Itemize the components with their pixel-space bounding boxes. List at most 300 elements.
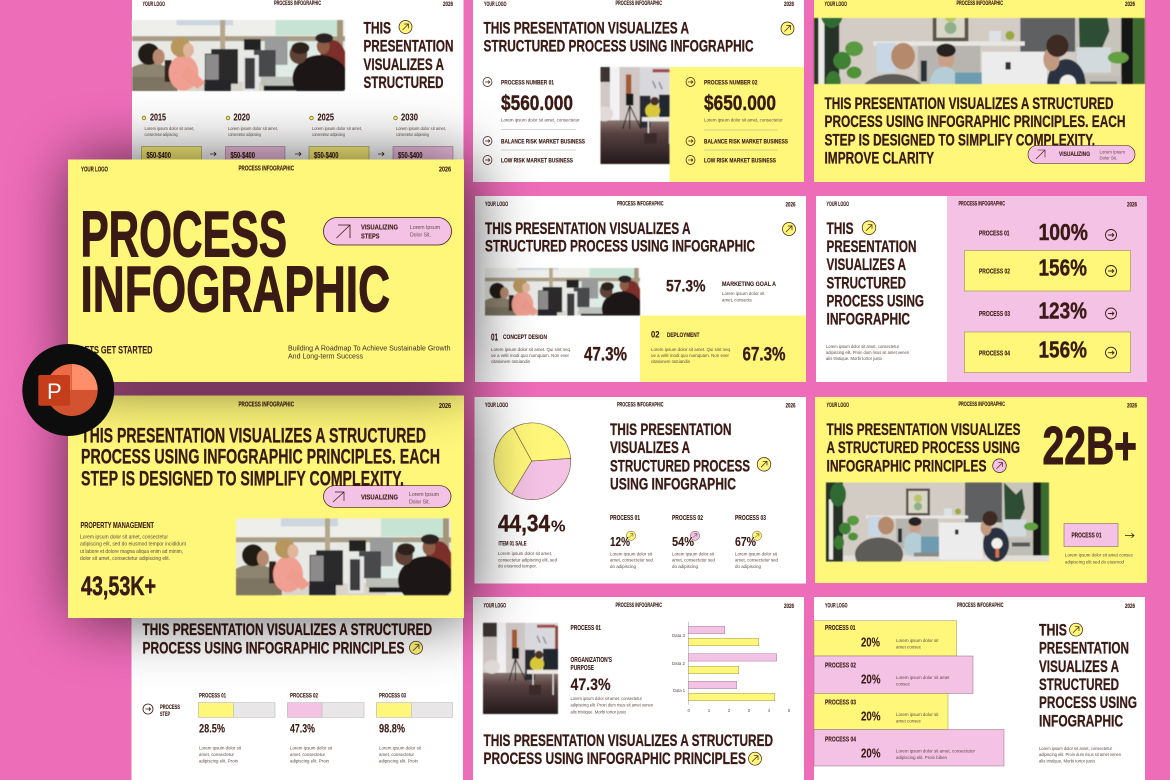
body text: Lorem ipsum dolor sit amet, consectetur <box>1039 746 1112 751</box>
photo: office <box>483 623 558 714</box>
process stats: Lorem ipsum dolor sit <box>672 552 715 556</box>
slide header: YOUR LOGO <box>826 403 849 409</box>
bar chart: Data 2 <box>672 661 686 666</box>
process stats: PROCESS 01 <box>610 515 640 522</box>
bar chart: 0 <box>688 708 690 713</box>
stepped bar 04: 20% <box>861 745 881 760</box>
process callout: adipiscing elit sed do eiusmod <box>1065 560 1124 564</box>
slide header <box>826 402 1137 410</box>
stat: item 01 sale: Lorem ipsum dolor sit amet, <box>498 551 552 557</box>
stepped bar 01 <box>814 621 956 656</box>
process stats: amet, consectetur sed <box>735 558 778 562</box>
bar chart: 3 <box>748 708 751 713</box>
stat: item 01 sale: % <box>551 519 566 536</box>
photo: office with desktop <box>814 0 1145 124</box>
process number 01: LOW RISK MARKET BUSINESS <box>501 158 573 164</box>
timeline: consectetur adipiscing <box>312 132 345 137</box>
slide header <box>81 166 451 174</box>
progress: process 03: PROCESS 03 <box>379 692 406 700</box>
bar chart: Data 3 <box>672 633 686 638</box>
heading <box>1039 621 1137 730</box>
step 01 concept design: Lorem ipsum dolor sit amet. Qui sint neq <box>491 347 570 352</box>
big stat: 43,53K+ <box>81 571 156 601</box>
slide header <box>485 402 796 410</box>
timeline <box>142 112 453 164</box>
slide header: PROCESS INFOGRAPHIC <box>617 402 664 408</box>
heading: PROCESS USING INFOGRAPHIC PRINCIPLES <box>142 639 404 657</box>
stepped bar 03: amet consec <box>896 718 922 724</box>
slide header: YOUR LOGO <box>142 2 165 8</box>
stepped bar 02: consec <box>896 682 911 686</box>
process step label <box>143 704 180 718</box>
tagline: LETS GET STARTED <box>80 344 153 356</box>
process stats: PROCESS 03 <box>735 515 766 522</box>
stepped bar 02 <box>814 656 973 694</box>
panel: stepped bars slide <box>814 597 1145 780</box>
slide header: PROCESS INFOGRAPHIC <box>956 1 1003 7</box>
process number 02: PROCESS NUMBER 02 <box>704 79 758 86</box>
text block: organization purpose: 47.3% <box>570 676 611 694</box>
slide header: 2026 <box>439 403 451 410</box>
process stats: amet, consectetur sed <box>672 558 715 562</box>
timeline: consectetur adipiscing <box>144 132 178 137</box>
stepped bar 03: Lorem ipsum dolor sit <box>896 712 939 717</box>
progress: process 03: adipiscing elit. Proin <box>379 758 418 764</box>
process number 02: BALANCE RISK MARKET BUSINESS <box>704 138 788 146</box>
slide header: PROCESS INFOGRAPHIC <box>238 402 294 408</box>
slide header: YOUR LOGO <box>484 604 506 610</box>
text block: property management: adipiscing elit, sed do eiusmod tempor incididunt <box>80 542 186 548</box>
heading: STRUCTURED PROCESS USING INFOGRAPHIC <box>484 37 754 56</box>
text block: organization purpose: alis tristique. Morbi tortor justo <box>570 710 626 714</box>
callout pill: Lorem Ipsum <box>410 225 440 231</box>
slide header: PROCESS INFOGRAPHIC <box>238 166 294 172</box>
stepped bar 04: Lorem ipsum dolor sit amet, consectetur <box>896 748 975 754</box>
process percent rows: PROCESS 04 <box>979 350 1010 358</box>
bar chart: 1 <box>708 708 711 713</box>
panel: bar chart slide <box>473 597 804 780</box>
big stat: 22B+ <box>1042 416 1137 476</box>
highlight rows <box>964 250 1130 372</box>
bar chart: 4 <box>768 708 771 713</box>
icon: arrow badge <box>410 641 422 654</box>
slide header: PROCESS INFOGRAPHIC <box>957 603 1004 609</box>
slide header: PROCESS INFOGRAPHIC <box>958 202 1005 208</box>
bar chart: 2 <box>728 708 731 713</box>
text block: organization purpose: adipiscing elit. Proin dum risus sit amet venen <box>570 702 653 708</box>
slide header: PROCESS INFOGRAPHIC <box>616 603 662 609</box>
process percent rows <box>979 219 1116 362</box>
process stats: 67% <box>735 534 756 549</box>
slide header: 2026 <box>1127 202 1137 208</box>
slide header: YOUR LOGO <box>485 202 508 208</box>
heading: THIS <box>364 20 391 38</box>
stepped bar 02: Lorem ipsum dolor sit amet <box>896 675 950 680</box>
heading: THIS PRESENTATION <box>610 420 732 439</box>
process stats: PROCESS 02 <box>672 515 703 522</box>
slide header: YOUR LOGO <box>485 403 508 409</box>
heading: VISUALIZES A <box>610 438 690 457</box>
heading: PROCESS USING INFOGRAPHIC PRINCIPLES. EACH <box>81 446 440 469</box>
yellow block <box>670 67 804 182</box>
timeline: $50-$400 <box>146 151 171 160</box>
process stats: Lorem ipsum dolor sit <box>610 552 653 556</box>
stat: item 01 sale: consectetur adipiscing elit, sed <box>498 558 557 564</box>
timeline: Lorem ipsum dolor sit amet, <box>312 126 362 131</box>
stepped bar 01: 20% <box>861 635 880 650</box>
heading: VISUALIZES A <box>364 56 444 74</box>
slide header <box>484 603 794 610</box>
heading: STRUCTURED <box>826 274 906 292</box>
subtitle: And Long-term Success <box>288 352 363 360</box>
heading: VISUALIZES A <box>826 255 906 274</box>
heading <box>142 621 432 657</box>
step 02 deployment: DEPLOYMENT <box>667 332 700 339</box>
process percent rows: 100% <box>1038 219 1088 245</box>
process stats: do adipiscing <box>735 564 761 569</box>
step 01 concept design: citationem ratciandis <box>491 359 531 364</box>
slide header: 2026 <box>784 2 794 8</box>
process percent rows: 156% <box>1038 336 1087 362</box>
body text: adipiscing elit. Proin dum risus sit amet venen <box>1039 752 1122 757</box>
timeline: Lorem ipsum dolor sit amet, <box>396 126 446 131</box>
process percent rows: 156% <box>1038 254 1087 280</box>
heading: STRUCTURED <box>364 74 444 92</box>
slide header: YOUR LOGO <box>825 604 848 610</box>
step 01 concept design: 47.3% <box>584 344 627 366</box>
stepped bar 02: 20% <box>861 671 881 686</box>
heading <box>484 731 773 768</box>
stepped bar 03: 20% <box>861 709 881 724</box>
heading: INFOGRAPHIC PRINCIPLES <box>826 456 986 476</box>
step 02 deployment: citationem ratciandis <box>651 359 691 364</box>
text block: organization purpose <box>570 625 653 714</box>
timeline: 2015 <box>150 112 166 124</box>
process percent rows: PROCESS 02 <box>979 268 1010 275</box>
heading: IMPROVE CLARITY <box>824 148 934 167</box>
callout pill: VISUALIZING <box>1059 151 1090 158</box>
panel: yellow photo slide <box>814 0 1145 182</box>
photo: team at monitors <box>122 17 348 103</box>
process stats: amet, consectetur sed <box>610 558 653 562</box>
slide header: 2026 <box>443 2 453 8</box>
stepped bar 04 <box>814 730 1004 766</box>
heading: PRESENTATION <box>1039 639 1129 658</box>
progress: process 01: amet, consectetur <box>199 752 234 757</box>
progress: process 01 <box>198 692 275 764</box>
progress: process 01: Lorem ipsum dolor sit <box>199 746 242 750</box>
progress: process 03: Lorem ipsum dolor sit <box>379 746 422 750</box>
process number 01: Lorem ipsum dolor sit amet, consectetur <box>501 118 580 122</box>
process number 01: $560.000 <box>501 92 573 115</box>
process percent rows: PROCESS 01 <box>979 230 1010 237</box>
callout pill: VISUALIZING <box>361 223 398 232</box>
stepped bar 02: PROCESS 02 <box>825 662 856 669</box>
progress: process 03 <box>376 692 452 764</box>
slide header: 2026 <box>786 404 796 410</box>
icon: arrow badge <box>993 459 1006 472</box>
timeline: $50-$400 <box>230 151 255 160</box>
process callout: Lorem ipsum dolor sit amet consec <box>1065 552 1134 558</box>
panel: marketing goal slide <box>475 196 806 382</box>
process stats <box>610 515 778 569</box>
slide header: 2026 <box>1125 2 1135 8</box>
callout pill: Dolor Sit. <box>1100 156 1117 160</box>
text block: property management: Lorem ipsum dolor sit amet, consectetur <box>80 534 168 540</box>
heading: STEP IS DESIGNED TO SIMPLIFY COMPLEXITY. <box>81 468 404 491</box>
heading: THIS PRESENTATION VISUALIZES A STRUCTURED <box>484 731 773 750</box>
step 02 deployment: 02 <box>651 329 660 340</box>
process callout <box>1064 524 1134 564</box>
timeline: 2025 <box>318 112 334 124</box>
panel: lower yellow slide <box>68 396 464 618</box>
step 01 concept design: 01 <box>491 332 498 344</box>
timeline: $50-$400 <box>314 151 339 160</box>
timeline: Lorem ipsum dolor sit amet, <box>228 126 278 131</box>
icon: arrow badge <box>1070 623 1082 636</box>
text block: property management: ut labore et dolore magna aliqua enim ad minim, <box>80 549 183 555</box>
timeline: 2020 <box>234 112 250 124</box>
text block: property management: PROPERTY MANAGEMENT <box>80 520 155 530</box>
process callout: PROCESS 01 <box>1072 532 1102 540</box>
heading: THIS PRESENTATION VISUALIZES A STRUCTURED <box>81 424 426 447</box>
text block: property management: dolor sit amet, consectetur adipiscing elit. <box>80 556 170 562</box>
heading: VISUALIZES A <box>1039 657 1119 676</box>
heading <box>610 420 750 493</box>
stat: marketing goal: MARKETING GOAL A <box>722 281 776 288</box>
bar chart <box>672 622 791 713</box>
heading: THIS <box>1039 621 1067 640</box>
body text <box>1039 746 1122 764</box>
progress: process 02: Lorem ipsum dolor sit <box>290 746 333 750</box>
process stats: Lorem ipsum dolor sit <box>735 552 778 556</box>
process stats: do adipiscing <box>610 564 636 569</box>
stat: item 01 sale <box>498 511 566 570</box>
slide header: PROCESS INFOGRAPHIC <box>958 402 1005 408</box>
step 02 deployment: ue a velit modi quo numquam. Non ever <box>651 353 729 358</box>
photo: office with desktop <box>826 482 1049 572</box>
heading: PROCESS USING INFOGRAPHIC PRINCIPLES <box>484 749 746 768</box>
heading: INFOGRAPHIC <box>1039 711 1123 730</box>
step 02 deployment <box>651 329 786 366</box>
heading: THIS PRESENTATION VISUALIZES A <box>485 219 690 238</box>
timeline: $50-$400 <box>398 151 423 160</box>
slide header <box>484 1 794 8</box>
text block: property management <box>80 520 186 562</box>
slide header: 2026 <box>786 202 796 208</box>
stat: item 01 sale: do eiusmod tempor. <box>498 564 537 570</box>
stepped bar 01: Lorem ipsum dolor sit <box>896 638 939 643</box>
slide header: YOUR LOGO <box>824 2 847 8</box>
text block: organization purpose: PROCESS 01 <box>570 625 601 632</box>
panel: process numbers slide <box>473 0 804 182</box>
stat: item 01 sale: 44,34 <box>498 511 550 538</box>
photo: team at monitors <box>226 518 454 604</box>
slide header <box>238 402 451 410</box>
stepped bar 01: amet consec <box>896 644 922 650</box>
body text: adipiscing elit. Proin dum risus sit amet venen <box>826 350 910 355</box>
callout pill: Dolor Sit. <box>410 232 431 238</box>
heading: THIS PRESENTATION VISUALIZES A <box>484 18 689 37</box>
process number 02: LOW RISK MARKET BUSINESS <box>704 158 776 164</box>
heading: PRESENTATION <box>826 237 916 256</box>
icon: arrow badge <box>862 221 876 234</box>
heading <box>364 20 454 92</box>
heading: STRUCTURED PROCESS <box>610 456 750 476</box>
icon: arrow badge <box>748 752 762 765</box>
progress: process 01: adipiscing elit. Proin <box>199 758 238 764</box>
process stats: 12% <box>610 534 630 549</box>
callout pill: Lorem Ipsum <box>409 492 439 498</box>
icon: arrow badge <box>757 458 771 471</box>
progress: process 01: 28.5% <box>199 721 225 735</box>
icon: arrow badge <box>782 222 796 236</box>
stepped bar 03 <box>814 694 948 730</box>
callout pill: STEPS <box>361 232 380 241</box>
progress: process 02: adipiscing elit. Proin <box>290 758 329 764</box>
heading <box>484 18 754 56</box>
bar chart: Data 1 <box>673 688 686 693</box>
heading: STRUCTURED <box>1039 675 1119 694</box>
slide header: PROCESS INFOGRAPHIC <box>274 1 321 7</box>
progress: process 03: 98.8% <box>379 721 405 735</box>
body text: alis tristique. Morbi tortor justo <box>1039 758 1096 764</box>
timeline: consectetur adipiscing <box>396 132 429 137</box>
stat: marketing goal: amet, consecte <box>722 298 752 302</box>
bar chart: 5 <box>788 708 791 713</box>
process percent rows: 123% <box>1038 298 1087 324</box>
slide header: 2026 <box>439 166 451 174</box>
slide header: 2026 <box>1125 604 1135 610</box>
timeline: Lorem ipsum dolor sit amet, <box>144 126 194 131</box>
stepped bar 04: adipiscing elit. Proin biben <box>896 755 947 760</box>
slide header <box>826 202 1137 208</box>
process stats: do adipiscing <box>672 564 698 569</box>
callout pill <box>324 486 451 507</box>
panel: 22B+ slide <box>815 397 1147 583</box>
timeline: consectetur adipiscing <box>228 132 261 137</box>
slide header: YOUR LOGO <box>826 202 849 208</box>
title: PROCESS <box>80 198 287 270</box>
text block: organization purpose: Lorem ipsum dolor sit amet, consectetur <box>570 696 642 701</box>
icon: arrow badge <box>781 22 794 35</box>
text block: organization purpose: PURPOSE <box>570 665 594 672</box>
slide header: YOUR LOGO <box>484 2 507 8</box>
body text: Lorem ipsum dolor sit amet, consectetur <box>826 344 899 349</box>
callout pill: Lorem Ipsum <box>1100 150 1125 154</box>
heading <box>485 219 755 256</box>
process number 01: BALANCE RISK MARKET BUSINESS <box>501 138 585 146</box>
icon: arrow badge <box>399 20 412 34</box>
callout pill <box>1028 146 1135 164</box>
subtitle: Building A Roadmap To Achieve Sustainable Growth <box>288 344 450 352</box>
slide header <box>485 202 796 208</box>
process number 02 <box>686 78 788 164</box>
timeline: 2030 <box>401 112 418 124</box>
heading: PROCESS USING <box>826 292 924 310</box>
slide header <box>142 1 453 8</box>
progress: process 02 <box>288 692 364 764</box>
panel: process step bars slide <box>132 610 463 780</box>
heading <box>826 420 1020 476</box>
process number 02: Lorem ipsum dolor sit amet, consectetur <box>704 118 783 122</box>
slide header: 2026 <box>784 604 794 610</box>
heading <box>81 424 440 491</box>
process number 02: $650.000 <box>704 92 776 115</box>
callout pill: VISUALIZING <box>361 492 398 502</box>
title <box>80 198 390 326</box>
stat: marketing goal: 57.3% <box>666 277 706 296</box>
progress: process 02: PROCESS 02 <box>290 692 318 700</box>
stepped bar 03: PROCESS 03 <box>825 700 856 706</box>
step 01 concept design: CONCEPT DESIGN <box>503 334 547 341</box>
heading: A STRUCTURED PROCESS USING <box>826 438 1020 457</box>
progress: process 01: PROCESS 01 <box>199 692 226 700</box>
heading <box>824 94 1126 167</box>
body text: alis tristique. Morbi tortor justo <box>826 356 883 361</box>
stepped bar 04: PROCESS 04 <box>825 736 856 744</box>
process number 01 <box>483 78 585 164</box>
heading: THIS <box>826 219 854 238</box>
process percent rows: PROCESS 03 <box>979 311 1010 318</box>
photo: office <box>595 67 675 164</box>
slide header <box>824 1 1135 8</box>
panel: cover slide <box>68 160 464 382</box>
progress: process 02: 47.3% <box>290 721 315 735</box>
heading: STRUCTURED PROCESS USING INFOGRAPHIC <box>485 237 755 256</box>
icon: PowerPoint badge: P <box>47 379 62 404</box>
icon: PowerPoint badge <box>22 344 114 436</box>
slide header: YOUR LOGO <box>81 166 108 174</box>
heading: THIS PRESENTATION VISUALIZES A STRUCTURED <box>142 621 432 639</box>
yellow block <box>640 316 806 382</box>
process number 01: PROCESS NUMBER 01 <box>501 79 554 86</box>
process step label: PROCESS <box>160 704 180 711</box>
slide header: PROCESS INFOGRAPHIC <box>617 202 664 208</box>
panel: pie chart slide <box>474 397 806 584</box>
heading: THIS PRESENTATION VISUALIZES <box>826 420 1020 439</box>
slide header: 2026 <box>1127 404 1137 410</box>
step 02 deployment: Lorem ipsum dolor sit amet. Qui sint neq <box>651 347 730 352</box>
stat: marketing goal <box>666 277 776 302</box>
slide header: PROCESS INFOGRAPHIC <box>616 1 662 7</box>
heading <box>826 219 924 329</box>
progress: process 03: amet, consectetur <box>379 752 414 757</box>
callout pill <box>324 218 452 245</box>
text block: organization purpose: ORGANIZATION'S <box>570 657 612 664</box>
title: INFOGRAPHIC <box>80 252 390 326</box>
callout pill: Dolor Sit. <box>409 500 430 506</box>
heading: USING INFOGRAPHIC <box>610 474 736 493</box>
panel: timeline slide <box>122 0 464 165</box>
body text <box>826 344 910 361</box>
step 02 deployment: 67.3% <box>742 344 786 366</box>
photo: team at monitors <box>478 264 642 326</box>
panel: percent list slide <box>816 196 1147 382</box>
pie chart <box>494 423 571 500</box>
heading: PRESENTATION <box>364 38 454 56</box>
subtitle <box>288 344 450 360</box>
stat: item 01 sale: ITEM 01 SALE <box>498 542 526 548</box>
slide header <box>825 603 1135 610</box>
drop shadow: lower yellow slide <box>72 396 472 618</box>
stat: marketing goal: Lorem ipsum dolor sit <box>722 291 765 296</box>
progress: process 02: amet, consectetur <box>290 752 325 757</box>
process stats: 54% <box>672 534 694 549</box>
stepped bar 01: PROCESS 01 <box>825 625 856 632</box>
drop shadow: cover slide <box>72 160 472 382</box>
step 01 concept design: ue a velit modi quo numquam. Non ever <box>491 353 569 358</box>
